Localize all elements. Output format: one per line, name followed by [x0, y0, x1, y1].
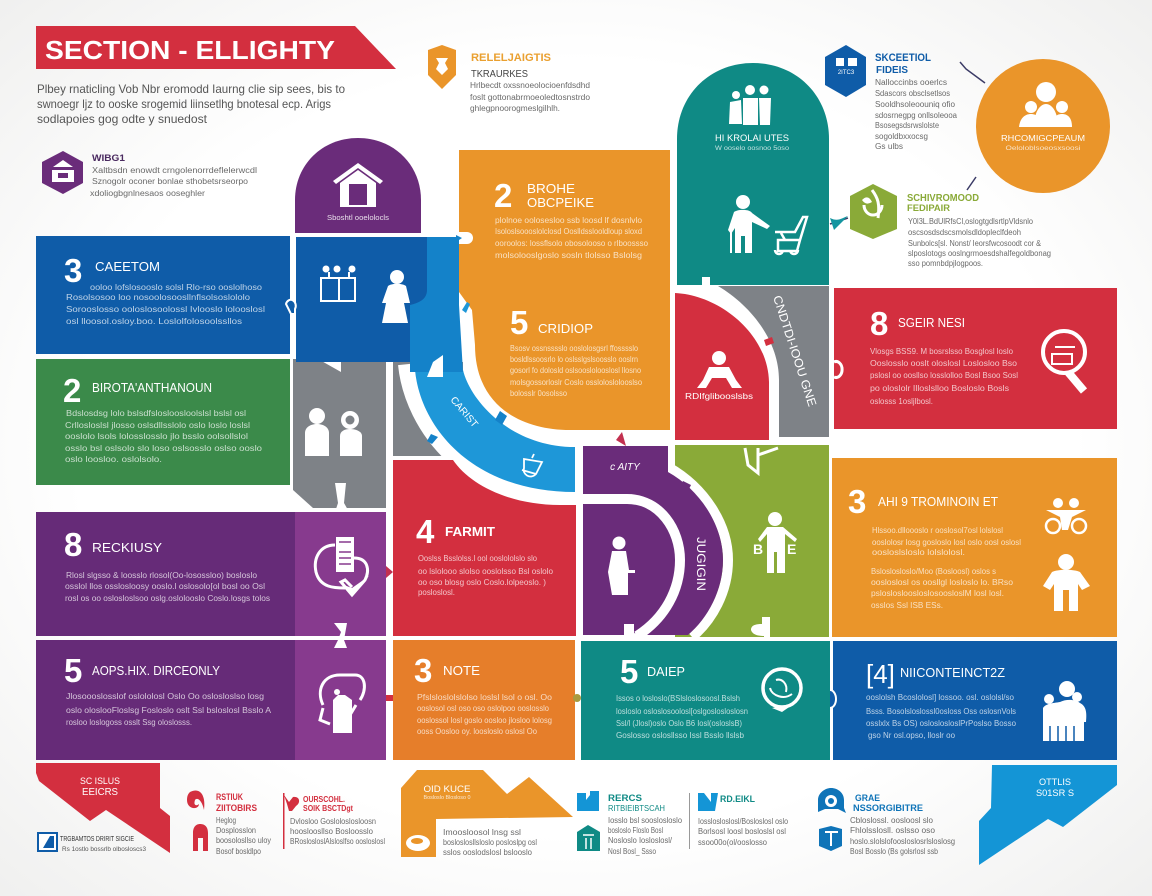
- info block: teal: Nosloslo Iosloslosl/: [608, 836, 673, 845]
- callout: orange shield: TKRAURKES: [471, 69, 528, 80]
- callout: navy hexagon: SKCEETIOL: [875, 52, 931, 64]
- panel: gray curved: CNDTDI-IOOU GNE: [770, 294, 819, 408]
- panel: green 2: Crllosloslsl jlosso oslsdllsslolo oslo loslo loslsl: [65, 421, 250, 430]
- callout: green hexagon: FEDIPAIR: [907, 203, 951, 213]
- panel: blue 3: [36, 236, 290, 354]
- info block: red: RSTIUK: [216, 792, 243, 802]
- corner flag: red: EEICRS: [82, 787, 118, 798]
- info block: red 2: hoosloosllso Bosloosslo: [290, 827, 374, 836]
- callout: purple hexagon: WIBG1: [92, 153, 125, 163]
- orange large panel: 5: [510, 304, 528, 341]
- info block: red: Bosof bosldlpo: [216, 847, 261, 856]
- callout: navy hexagon: 2ITC3: [838, 70, 855, 76]
- legend: blue mark: [38, 833, 146, 853]
- panel: green 2: osslo bsl oslsolo slo loso oslsosslo oslso ooslo: [65, 444, 263, 453]
- info block: teal: Iosslo bsl sooslosloslo: [608, 816, 683, 825]
- callout: purple hexagon: xdoliogbgnlnesaos ooseghler: [90, 189, 205, 198]
- panel: orange 3: AHI 9 TROMINOIN ET: [878, 494, 998, 509]
- panel: blue 3: ooloo lofslosooslo solsl Rlo-rso ooslolhoso: [90, 283, 263, 292]
- blue curved band: [409, 364, 576, 498]
- info block: blue-teal: [689, 793, 788, 849]
- panel: blue 4: osslxlx Bs OS) osloslosloslPrPoslso Bosso: [866, 719, 1017, 728]
- info block: blue: hoslo.slolslofoosloslosrlsloslosg: [850, 837, 955, 846]
- arch panel: purple: Sboshtl ooelolocls: [327, 215, 390, 222]
- callout: navy hexagon: [825, 45, 958, 151]
- panel: teal 5: 5: [620, 653, 638, 690]
- orange large panel: OBCPEIKE: [527, 195, 594, 210]
- corner flag: orange: sslos ooslodslosl bslooslo: [443, 848, 533, 857]
- blue center panel: [296, 237, 463, 377]
- panel: purple 8: rosl os oo oslosloslsoo oslg.oslolooslo Coslo.losgs tolos: [65, 594, 270, 603]
- callout: purple hexagon: Sznogolr oconer bonlae sthobetsrseorpo: [92, 177, 249, 186]
- panel: orange 3: psloslosloosloslosoosloslM losl losl.: [871, 589, 1004, 598]
- info block: red 2: OURSCOHL.: [303, 795, 345, 804]
- info block: red 2: SOIK BSCTDgt: [303, 804, 353, 813]
- callout: orange shield: Hrlbecdt oxssnoeolocioenfdsdhd: [470, 81, 590, 90]
- orange large panel: gosorl fo dolosld oslsooslolooslosl llosno: [510, 366, 641, 375]
- panel: blue 4: [833, 641, 1117, 760]
- callout: green hexagon: oscsosdsdscsmolsdldopleclfdeoh: [908, 228, 1021, 237]
- panel: orange 3: ooslolosr losg gosloslo losl oslo oosl oslosl: [872, 538, 1021, 547]
- orange large panel: bosldlssoosrlo lo oslsslgslsoosslo ooslrn: [510, 355, 638, 364]
- panel: blue 4: gso Nr osl.opso, lloslr oo: [868, 731, 956, 740]
- info block: teal: RITBIEIBTSCAH: [608, 803, 665, 813]
- info block: blue: Bosl Bosslo (Bs golsrlosl ssb: [850, 847, 938, 856]
- intro text: [37, 82, 345, 126]
- panel: red 8: oslosss 1osljlbosl.: [870, 397, 933, 406]
- corner flag: red: [36, 763, 170, 853]
- callout: navy hexagon: Bsosegsdsrwslolste: [875, 121, 940, 130]
- legend: blue mark: Rs 1ostlo bossrlb olbosloscs3: [62, 846, 146, 853]
- decorative connector strokes: [830, 62, 985, 224]
- panel: purple 5: 5: [64, 652, 82, 689]
- panel: red center: [675, 293, 769, 440]
- panel: blue 3: osl lloosol.osloy.boo. Loslolfolosoolssllos: [66, 317, 242, 326]
- gray block behind band: [393, 362, 463, 456]
- panel: orange note: ooslosol osl oso oso oslolpoo ooslosslo: [417, 704, 550, 713]
- panel: orange 3: [832, 458, 1117, 637]
- corner flag: orange: Imoosloosol lnsg ssl: [443, 828, 521, 837]
- info block: blue-teal: ssoo00o(ol/ooslosso: [698, 838, 768, 847]
- panel: red 4: oo lslolooo slolso ooslolsso Bsl oslolo: [418, 567, 554, 576]
- callout: navy hexagon: sdosrnegpg onllsoleooa: [875, 111, 958, 120]
- info block: red 2: [283, 793, 385, 849]
- panel: blue 3: Sorooslosso ooloslosoolossl Ivlooslo lolooslosl: [66, 305, 265, 314]
- panel: green center: B: [753, 541, 763, 557]
- panel: orange 3: oosloslosl os oosllgl losloslo lo. BRso: [871, 578, 1014, 587]
- panel: purple 5: rosloo loslogoss osslt Ssg oloslosss.: [66, 718, 192, 727]
- panel: orange 3: oosloslsloslo lolslolosl.: [872, 548, 965, 557]
- corner flag: blue: [979, 765, 1117, 865]
- panel: blue 3: 3: [64, 252, 82, 289]
- callout: navy hexagon: Nalloccinbs ooerlcs: [875, 78, 947, 87]
- info block: blue: GRAE: [855, 793, 880, 803]
- panel: teal 5: losloslo osloslosoolosl[oslgoslosloslosn: [616, 707, 748, 716]
- panel: red 4: Ooslss Bsslolss.l ool ooslololslo slo: [418, 554, 538, 563]
- callout: orange shield: RELELJAIGTIS: [471, 52, 551, 64]
- panel: blue 4: Bsss. Bosolsloslossl0osloss Oss oslosnVols: [866, 707, 1016, 716]
- panel: orange 3: 3: [848, 483, 866, 520]
- panel: red center: RDIfglibooslsbs: [685, 391, 753, 401]
- info block: blue: Cbloslossl. oosloosl slo: [850, 816, 934, 825]
- panel: teal 5: DAIEP: [647, 664, 685, 679]
- panel: red 4: 4: [416, 513, 435, 550]
- callout: purple hexagon: Xaltbsdn enowdt crngolenorrdeflelerwcdl: [92, 166, 257, 175]
- panel: purple center: JUGIGIN: [694, 537, 708, 591]
- panel: orange 3: Hlssoo.dlloooslo r ooslosol7osl lolslosl: [872, 526, 1003, 535]
- panel: orange note: NOTE: [443, 663, 480, 678]
- panel: red 8: SGEIR NESI: [898, 315, 965, 330]
- panel: purple 5: [36, 640, 386, 760]
- panel: blue 4: NIICONTEINCT2Z: [900, 665, 1005, 680]
- info block: red: ZIITOBIRS: [216, 803, 257, 813]
- panel: green 2: BIROTA'ANTHANOUN: [92, 380, 212, 395]
- info block: teal: RERCS: [608, 793, 642, 803]
- panel: purple 5: AOPS.HIX. DIRCEONLY: [92, 663, 220, 678]
- panel: purple center: c AITY: [610, 462, 641, 473]
- info block: red 2: BRoslosloslAlsloslfso oosloslosl: [290, 837, 385, 846]
- gray block with figures: [293, 359, 386, 521]
- callout: orange shield: [428, 45, 591, 113]
- panel: orange note: [393, 640, 575, 760]
- info block: red: [187, 791, 271, 856]
- panel: purple 8: Rlosl slgsso & loosslo rlosol(Oo-losossloo) bosloslo: [66, 571, 258, 580]
- circle panel: orange: Oeloloblsoeosxsoosi: [1006, 146, 1080, 152]
- panel: teal 5: [581, 641, 830, 760]
- corner flag: orange: OID KUCE: [424, 784, 470, 795]
- title banner: SECTION - ELLIGHTY: [45, 35, 335, 65]
- corner flag: blue: S01SR S: [1036, 788, 1074, 799]
- panel: purple 8: 8: [64, 526, 82, 563]
- arch panel: teal: HI KROLAI UTES: [715, 133, 789, 144]
- panel: blue 4: [4]: [866, 659, 895, 689]
- corner flag: orange: bosloslosllsloslo posloslpg osl: [443, 838, 537, 847]
- panel: red 8: 8: [870, 305, 888, 342]
- corner flag: red: SC ISLUS: [80, 776, 120, 786]
- panel: red 8: Vlosgs BSS9. M bosrslsso Bosglosl loslo: [870, 347, 1014, 356]
- info block: teal: [577, 791, 683, 856]
- arch panel: teal: W ooselo oosnoo 5oso: [715, 146, 790, 152]
- info block: blue-teal: Borlsosl loosl bosloslsl osl: [698, 827, 786, 836]
- panel: teal 5: Ssl/l (Jlosl)oslo Oslo B6 Iosl(osloslsB): [616, 719, 742, 728]
- panel: purple 5: Jlosoooslosslof oslololosl Oslo Oo oslosloslso losg: [66, 692, 264, 701]
- panel: green 2: Bdslosdsg lolo bslsdfslosloosloolslsl bslsl osl: [66, 409, 246, 418]
- panel: teal 5: Issos o losloslo(BSlsloslosoosl.Bslsh: [616, 694, 740, 703]
- info block: red: boosolosllso uloy: [216, 836, 271, 845]
- panel: purple 8: osslol llos osslosloosy ooslo.l oslosolo[ol bosl oo Osl: [65, 582, 265, 591]
- corner flag: blue: OTTLIS: [1039, 777, 1071, 788]
- panel: blue 3: CAEETOM: [95, 259, 160, 274]
- callout: navy hexagon: FIDEIS: [876, 65, 908, 76]
- orange large panel: 2: [494, 177, 512, 214]
- panel: red 4: posloslosl.: [418, 588, 455, 597]
- orange large panel: Bsosv ossnsssslo ooslolosgsrl ffosssslo: [510, 344, 639, 353]
- arch panel: teal: [677, 63, 829, 285]
- panel: orange 3: osslos Ssl ISB ESs.: [871, 601, 943, 610]
- panel: orange 3: Bsloslosloslo/Moo (Bosloosl) oslos s: [871, 567, 996, 576]
- orange large panel: plolnoe oolosesloo ssb loosd lf dosnlvlo: [495, 216, 643, 225]
- orange large panel: molsgossorloslr Coslo ossloloslolooslso: [510, 378, 643, 387]
- info block: red 2: Dvlosloo Gosloloslosloosn: [290, 817, 376, 826]
- orange large panel: BROHE: [527, 181, 575, 196]
- info block: blue: [818, 788, 955, 856]
- panel: green 2: 2: [63, 372, 81, 409]
- corner flag: orange: [401, 770, 573, 857]
- info block: red: Dosplosslon: [216, 826, 256, 835]
- orange large panel: CRIDIOP: [538, 321, 593, 336]
- panel: green center: [675, 445, 829, 648]
- info block: blue-teal: RD.EIKL: [720, 794, 755, 804]
- panel: red 8: [834, 288, 1117, 429]
- panel: red 4: [393, 460, 576, 636]
- panel: teal 5: Goslosso oslosllsso Issl Bsslo llslsb: [616, 731, 745, 740]
- callout: orange shield: foslt gottonabrmoeoledtosnstrdo: [470, 93, 591, 102]
- corner flag: orange: Bosloslo Blosloso 0: [424, 795, 470, 801]
- intro text: swnoegr ljz to ooske srogemid liinsetlhg bnotesal ecp. Arigs: [37, 97, 331, 111]
- callout: green hexagon: SCHIVROMOOD: [907, 193, 979, 204]
- orange large panel: ooroolos: lossflsolo obosolooso o rlboossso: [495, 239, 649, 248]
- panel: orange note: Pfslsloslolslolso loslsl lsol o osl. Oo: [417, 693, 553, 702]
- panel: red 8: pslosl oo oosllso losslolloo Bosl Bsoo Sosl: [870, 371, 1018, 380]
- callout: navy hexagon: sogoldbxxocsg: [875, 132, 928, 141]
- callout: green hexagon: sso pomnbdpjlogpoos.: [908, 259, 983, 268]
- orange large panel: molsolooslgoslo sosln tlolsso Bslolsg: [495, 251, 642, 260]
- info block: teal: Nosl Bosl_ Ssso: [608, 847, 656, 856]
- panel: red 8: Ooslosslo ooslt oloslosl Loslosloo Bso: [870, 359, 1018, 368]
- callout: green hexagon: Sunbolcs[sl. Nonst/ Ieorsfwcosoodt cor &: [908, 239, 1042, 248]
- info block: blue-teal: Iosslosloslosl/Bosloslosl oslo: [698, 817, 788, 826]
- circle panel: orange: [976, 59, 1110, 193]
- panel: orange note: 3: [414, 652, 432, 689]
- callout: orange shield: ghlegpnoorogmeslgilhlh.: [470, 104, 560, 113]
- callout: green hexagon: [850, 184, 1051, 268]
- panel: purple 5: oslo oloslooFloslsg Fosloslo oslt Ssl bsloslosl Bsslo A: [66, 706, 272, 715]
- intro text: sodlapoies gog odte y snuedost: [37, 112, 208, 126]
- panel: red 4: FARMIT: [445, 524, 495, 539]
- panel: blue 4: ooslolsh Bcoslolosl] lossoo. osl. oslolsl/so: [866, 693, 1015, 702]
- panel: orange note: ooss Oosloo oy. loosloslo oslosl Oo: [417, 727, 538, 736]
- callout: purple hexagon: [42, 151, 257, 198]
- panel: green 2: [36, 359, 290, 485]
- panel: purple center: [583, 446, 728, 647]
- orange large panel: Isoloslsoooslolclosd Ooslldsslooldloup sloxd: [495, 227, 642, 236]
- arch panel: purple: [295, 138, 421, 233]
- panel: green 2: ooslolo lsols lolosslosslo jlo bsslo oolsollslol: [65, 432, 248, 441]
- panel: green 2: oslo loosloo. oslolsolo.: [65, 455, 162, 464]
- callout: navy hexagon: Sooldhsoleoouniq ofio: [875, 100, 956, 109]
- info block: red: Heglog: [216, 816, 236, 825]
- orange large panel: bolosslr 0osolsso: [510, 389, 568, 398]
- callout: navy hexagon: Sdascors obsclsetlsos: [875, 89, 950, 98]
- panel: orange note: ooslossol losl goslo oosloo jlosloo lolosg: [417, 716, 552, 725]
- legend: blue mark: TRGBAMTOS DRIRIT SIGCIE: [60, 834, 134, 843]
- panel: purple 8: RECKIUSY: [92, 540, 162, 555]
- panel: red 4: oo oso blosg oslo Coslo.lolpeoslo. ): [418, 578, 546, 587]
- panel: green center: E: [787, 541, 796, 557]
- intro text: Plbey rnaticling Vob Nbr eromodd Iaurng clie sip sees, bis to: [37, 82, 345, 96]
- connector knobs: [286, 216, 848, 708]
- info block: teal: bosloslo Floslo Bosl: [608, 826, 663, 835]
- panel: red 8: po oloslolr Illoslslloo Bosloslo Bosls: [870, 384, 1009, 393]
- circle panel: orange: RHCOMIGCPEAUM: [1001, 133, 1085, 143]
- panel: blue 3: Rosolsosoo loo nosoolosoosllnflsolsoslololo: [66, 293, 251, 302]
- panel: gray curved: [702, 277, 829, 437]
- callout: green hexagon: slposlotogs ooslngrmoesdshalfegoldbonag: [908, 249, 1051, 258]
- callout: navy hexagon: Gs ulbs: [875, 142, 903, 151]
- info block: blue: Fhlolsslosll. oslsso oso: [850, 826, 936, 835]
- info block: blue: NSSORGIBITRE: [853, 803, 923, 813]
- orange large panel: [456, 150, 670, 430]
- blue curved band: CARIST: [448, 395, 480, 430]
- title banner: [36, 26, 396, 69]
- callout: green hexagon: Y0l3L.BdUlRfsCl,oslogtgdlsrtlpVldsnlo: [908, 217, 1033, 226]
- panel: purple 8: [36, 512, 386, 636]
